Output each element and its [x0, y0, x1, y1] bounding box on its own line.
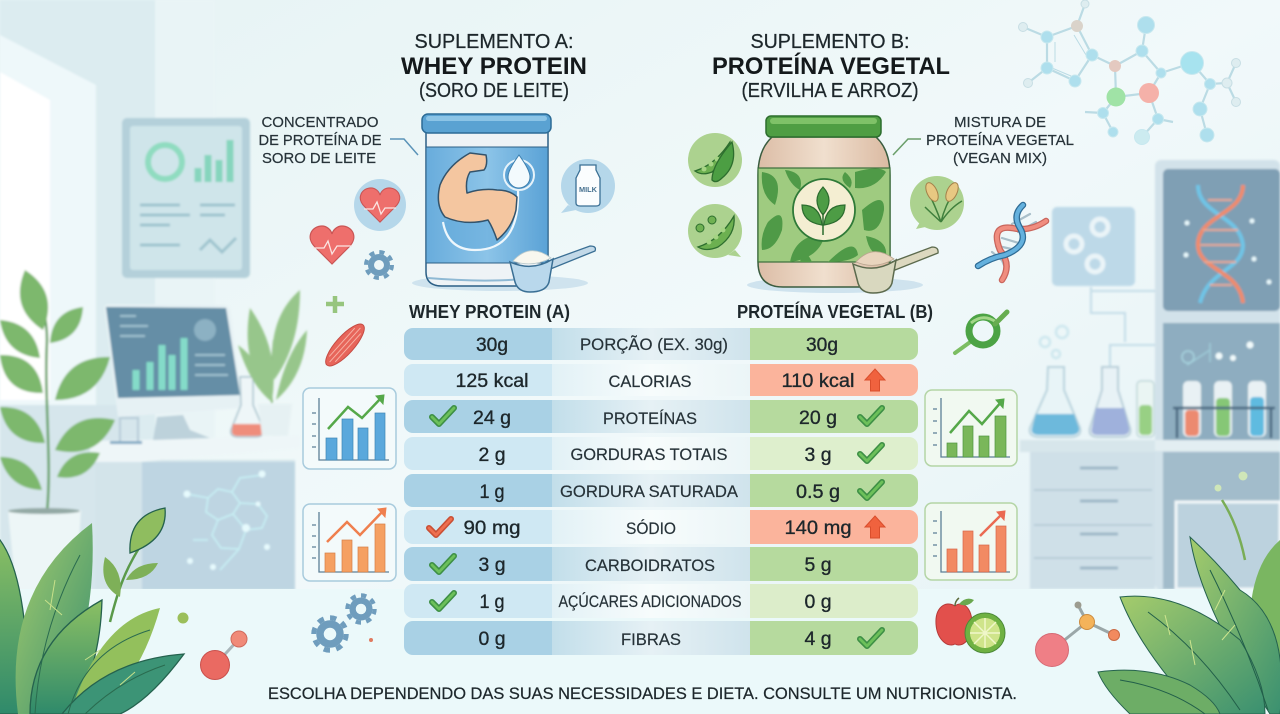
icon: green ring — [955, 312, 1007, 353]
icon: muscle — [320, 319, 370, 371]
leaf emblem — [793, 179, 855, 241]
note: concentrado: SORO DE LEITE — [262, 150, 376, 167]
cabinet — [1020, 440, 1155, 589]
lab flasks — [1030, 367, 1154, 437]
chart card: blue bars — [303, 388, 396, 469]
row: açúcares adicionados: 1 g — [480, 591, 504, 613]
row: açúcares adicionados — [404, 584, 918, 618]
row: proteínas — [404, 400, 918, 433]
row: proteínas: PROTEÍNAS — [603, 409, 697, 428]
icon bubble: milk — [561, 159, 615, 213]
row: gordura saturada — [404, 474, 918, 507]
chart card: green bars — [925, 390, 1017, 466]
note: concentrado — [258, 114, 382, 167]
desk and under-desk — [90, 436, 300, 590]
icon: heart — [310, 226, 354, 264]
note: concentrado: DE PROTEÍNA DE — [258, 132, 382, 149]
row: porção: 30g — [476, 334, 508, 356]
row: calorias: CALORIAS — [608, 372, 692, 391]
note: mistura: PROTEÍNA VEGETAL — [926, 132, 1074, 149]
supplement A heading — [401, 31, 587, 102]
note: mistura — [926, 114, 1074, 167]
icon bubble: peas — [688, 204, 742, 258]
shelf test tubes — [1155, 342, 1280, 451]
icon bubble: heart — [354, 179, 406, 231]
table headers — [409, 301, 933, 322]
row: gorduras totais — [404, 437, 918, 470]
right gear panel — [1052, 207, 1155, 372]
row: fibras: FIBRAS — [621, 630, 681, 649]
supplement A heading: WHEY PROTEIN — [401, 53, 587, 80]
scoop B — [853, 247, 938, 293]
chart card: orange bars left — [303, 504, 396, 581]
footer note: ESCOLHA DEPENDENDO DAS SUAS NECESSIDADES E DIETA. CONSULTE UM NUTRICIONISTA. — [268, 684, 1017, 703]
lab shelf — [1155, 160, 1280, 590]
molecule: bottom left — [178, 612, 247, 680]
table headers: WHEY PROTEIN (A) — [409, 302, 570, 322]
row: gorduras totais: GORDURAS TOTAIS — [570, 445, 728, 464]
icon: flexed arm — [438, 153, 517, 240]
icon bubble: pea pods — [688, 133, 742, 187]
icon bubble: rice — [910, 176, 964, 230]
note: concentrado: CONCENTRADO — [262, 114, 378, 131]
note: mistura: (VEGAN MIX) — [953, 150, 1047, 167]
nutrition table — [404, 328, 918, 655]
left wall and window — [0, 0, 215, 590]
row: gordura saturada: 0.5 g — [796, 481, 840, 503]
row: fibras: 0 g — [478, 628, 506, 650]
row: porção — [404, 328, 918, 360]
screen dna — [1184, 185, 1272, 303]
glowing molecule — [184, 470, 270, 570]
row: gordura saturada: GORDURA SATURADA — [560, 482, 739, 501]
icon bubble: milk: MILK — [579, 187, 597, 194]
row: sódio — [404, 510, 918, 544]
chart card: red bars right — [925, 503, 1017, 580]
vegetal jar — [747, 116, 923, 293]
row: fibras — [404, 621, 918, 655]
connector A — [390, 139, 418, 155]
supplement B heading: (ERVILHA E ARROZ) — [742, 80, 918, 102]
foreground plant: bottom right — [1098, 472, 1280, 714]
desk flask — [231, 377, 264, 437]
label leaves — [762, 168, 886, 262]
molecule: bottom right — [1036, 602, 1120, 666]
supplement A heading: SUPLEMENTO A: — [414, 31, 574, 53]
left plant pot — [8, 508, 81, 592]
table headers: PROTEÍNA VEGETAL (B) — [737, 301, 933, 322]
row: gorduras totais: 3 g — [804, 444, 832, 466]
row: proteínas: 24 g — [473, 407, 511, 429]
row: proteínas: 20 g — [799, 407, 837, 429]
icon: water drop — [504, 155, 534, 190]
row: calorias: 110 kcal — [782, 370, 854, 392]
row: porção: 30g — [806, 334, 838, 356]
row: calorias: 125 kcal — [456, 370, 528, 392]
scoop A — [510, 246, 595, 292]
supplement B heading: SUPLEMENTO B: — [750, 31, 910, 53]
row: carboidratos — [404, 547, 918, 581]
note: mistura: MISTURA DE — [954, 114, 1046, 131]
row: carboidratos: 3 g — [478, 554, 506, 576]
icon: dna — [978, 205, 1046, 280]
row: calorias — [404, 364, 918, 396]
molecule: top right — [1018, 0, 1240, 144]
connector B — [893, 139, 921, 155]
supplement B heading: PROTEÍNA VEGETAL — [712, 52, 950, 80]
row: carboidratos: 5 g — [804, 554, 832, 576]
row: sódio: 90 mg — [464, 517, 520, 539]
whey tub — [412, 114, 588, 291]
icon: gears bottom — [314, 595, 375, 650]
row: gorduras totais: 2 g — [478, 444, 506, 466]
row: fibras: 4 g — [804, 628, 832, 650]
foreground plant: bottom left — [0, 508, 184, 714]
row: açúcares adicionados: 0 g — [804, 591, 832, 613]
supplement B heading — [712, 31, 950, 102]
row: açúcares adicionados: AÇÚCARES ADICIONADOS — [558, 592, 742, 611]
monitor — [104, 304, 241, 444]
wall dashboard — [122, 118, 250, 278]
icon: plus — [326, 296, 344, 313]
back plant — [238, 290, 307, 436]
row: sódio: 140 mg — [784, 517, 852, 539]
icon: apple and lime — [936, 598, 1005, 653]
icon: gear A — [366, 252, 392, 278]
row: sódio: SÓDIO — [626, 519, 676, 538]
bubbles above flasks — [1040, 326, 1068, 358]
row: carboidratos: CARBOIDRATOS — [585, 556, 715, 575]
emblem ring — [443, 190, 518, 250]
floor band — [0, 589, 1280, 714]
supplement A heading: (SORO DE LEITE) — [419, 80, 569, 102]
left tall plant — [0, 270, 115, 512]
row: gordura saturada: 1 g — [480, 481, 504, 503]
row: porção: PORÇÃO (EX. 30g) — [580, 335, 728, 354]
